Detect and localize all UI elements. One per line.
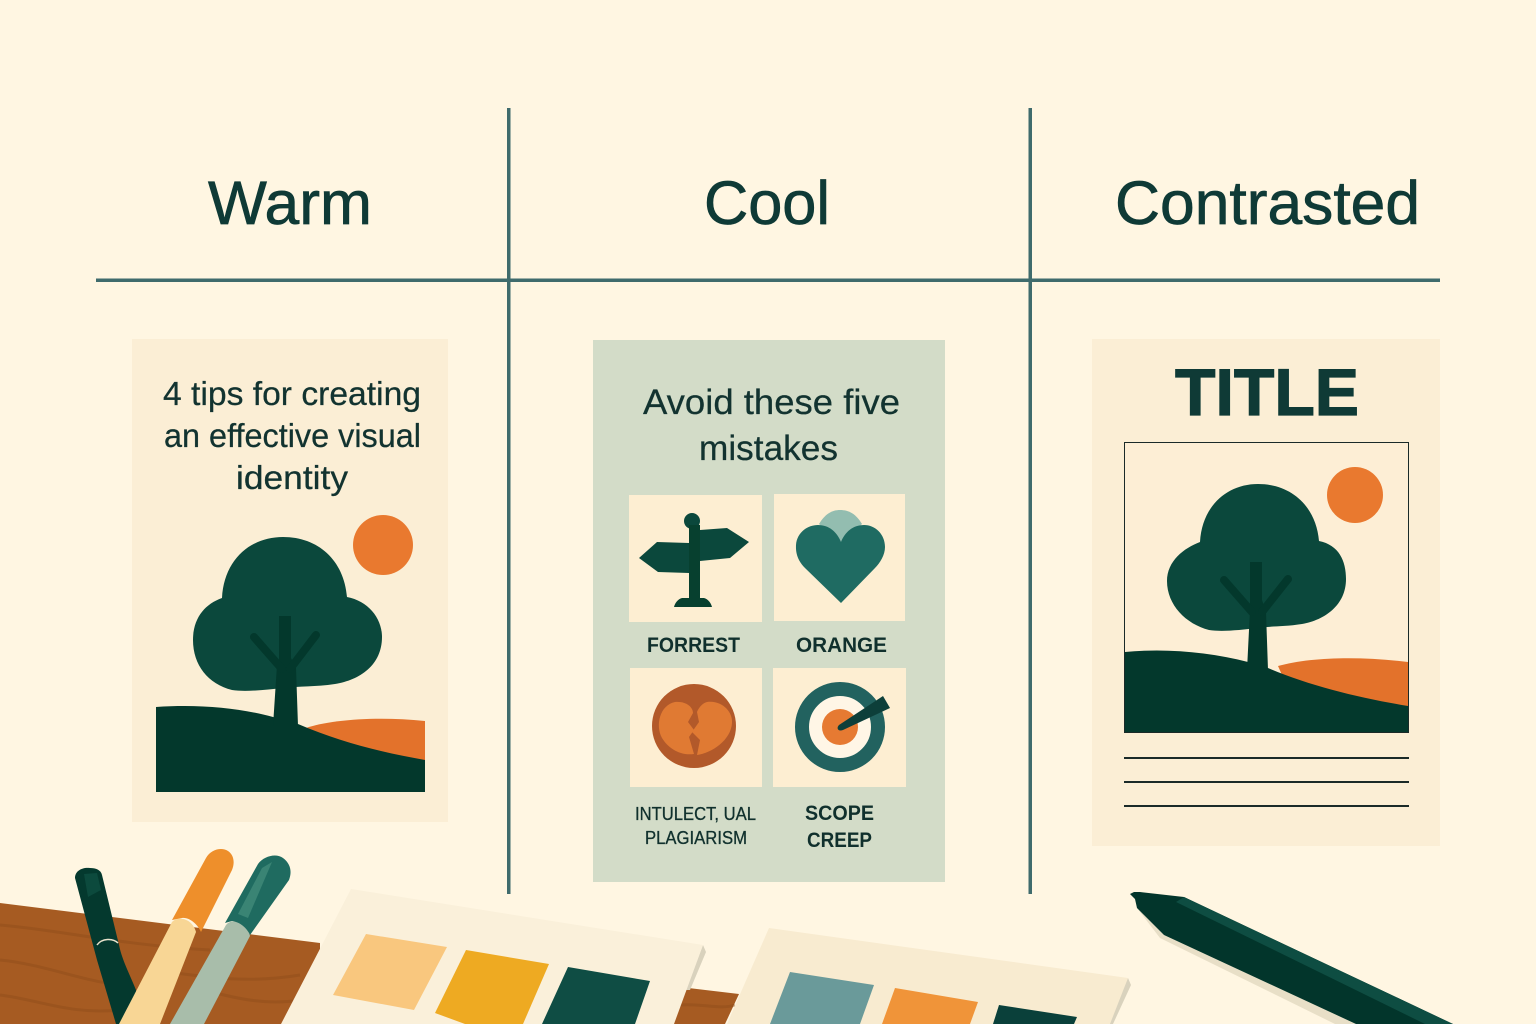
warm poster orange hill bbox=[306, 719, 425, 770]
heading: Warm: Warm bbox=[208, 169, 372, 237]
contrasted poster title: TITLE bbox=[1175, 355, 1359, 429]
warm poster sun bbox=[353, 515, 413, 575]
swatch card: cool palette bbox=[727, 928, 1131, 1024]
cool poster title: mistakes bbox=[699, 429, 838, 468]
tile: broken heart icon bbox=[630, 668, 762, 787]
warm poster title: 4 tips for creating bbox=[163, 375, 421, 412]
tile labels bbox=[635, 634, 887, 852]
cream and orange marker bbox=[119, 849, 234, 1024]
tile labels: PLAGIARISM bbox=[645, 828, 747, 848]
tile labels: INTULECT, UAL bbox=[635, 804, 756, 824]
cool poster title bbox=[643, 383, 900, 468]
warm poster title: an effective visual bbox=[164, 417, 421, 454]
tile labels: SCOPE bbox=[805, 802, 874, 825]
contrasted poster text lines bbox=[1124, 757, 1409, 807]
dark green marker bbox=[75, 868, 136, 1024]
swatch card: warm palette bbox=[281, 889, 706, 1024]
tile labels: FORREST bbox=[647, 634, 740, 657]
tile: target icon bbox=[773, 668, 906, 787]
panel: contrasted poster bbox=[1092, 339, 1440, 846]
wooden desk bbox=[0, 903, 739, 1024]
contrasted poster picture bbox=[1124, 442, 1408, 732]
warm poster title bbox=[163, 375, 421, 496]
heading: Cool: Cool bbox=[704, 169, 830, 237]
tile labels: CREEP bbox=[807, 829, 872, 852]
warm poster hill bbox=[156, 706, 425, 792]
warm poster trunk bbox=[254, 616, 316, 726]
panel: cool poster bbox=[593, 340, 945, 882]
heading: Contrasted: Contrasted bbox=[1115, 169, 1420, 237]
warm poster tree crown bbox=[193, 537, 382, 691]
sage and teal marker bbox=[170, 856, 291, 1024]
warm poster title: identity bbox=[236, 459, 349, 496]
tile: signpost icon bbox=[629, 495, 762, 622]
tile labels: ORANGE bbox=[796, 634, 887, 657]
tile: heart icon bbox=[774, 494, 905, 621]
dark green pen bbox=[1130, 892, 1453, 1024]
cool poster title: Avoid these five bbox=[643, 383, 900, 422]
panel: warm poster bbox=[132, 339, 448, 822]
